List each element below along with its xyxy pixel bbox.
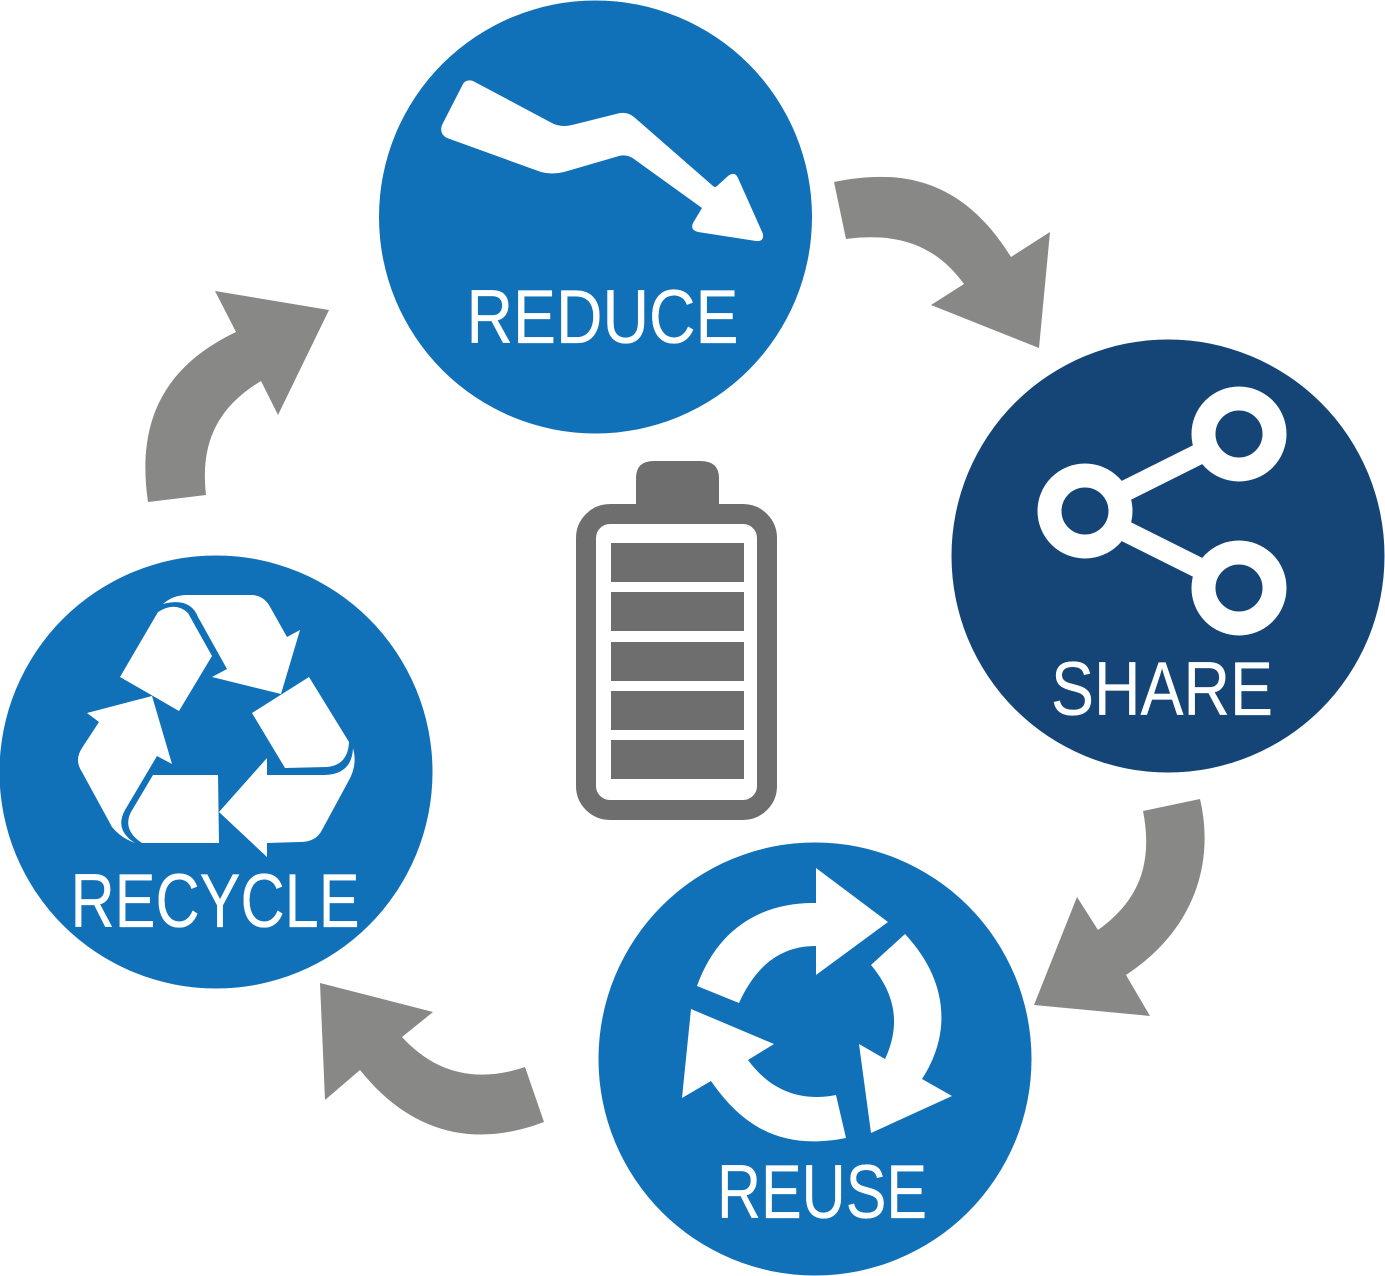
icon: downward trend arrow [441, 80, 763, 241]
arrow: reduce to share [834, 177, 1050, 348]
panel: share [952, 340, 1384, 772]
arrow: share to reuse [1034, 799, 1205, 1016]
panel: reuse [598, 842, 1032, 1276]
heading: recycle: RECYCLE [70, 859, 360, 944]
heading: reduce: REDUCE [466, 275, 738, 360]
icon: share nodes [1050, 398, 1274, 624]
icon: recycling symbol [78, 595, 355, 857]
heading: share: SHARE [1051, 647, 1273, 732]
panel: recycle [0, 556, 432, 988]
panel: reduce [379, 0, 812, 434]
icon: circular arrows [682, 868, 952, 1141]
icon: battery [586, 461, 767, 810]
arrow: recycle to reduce [145, 291, 329, 502]
heading: reuse: REUSE [717, 1150, 927, 1235]
arrow: reuse to recycle [320, 983, 544, 1134]
